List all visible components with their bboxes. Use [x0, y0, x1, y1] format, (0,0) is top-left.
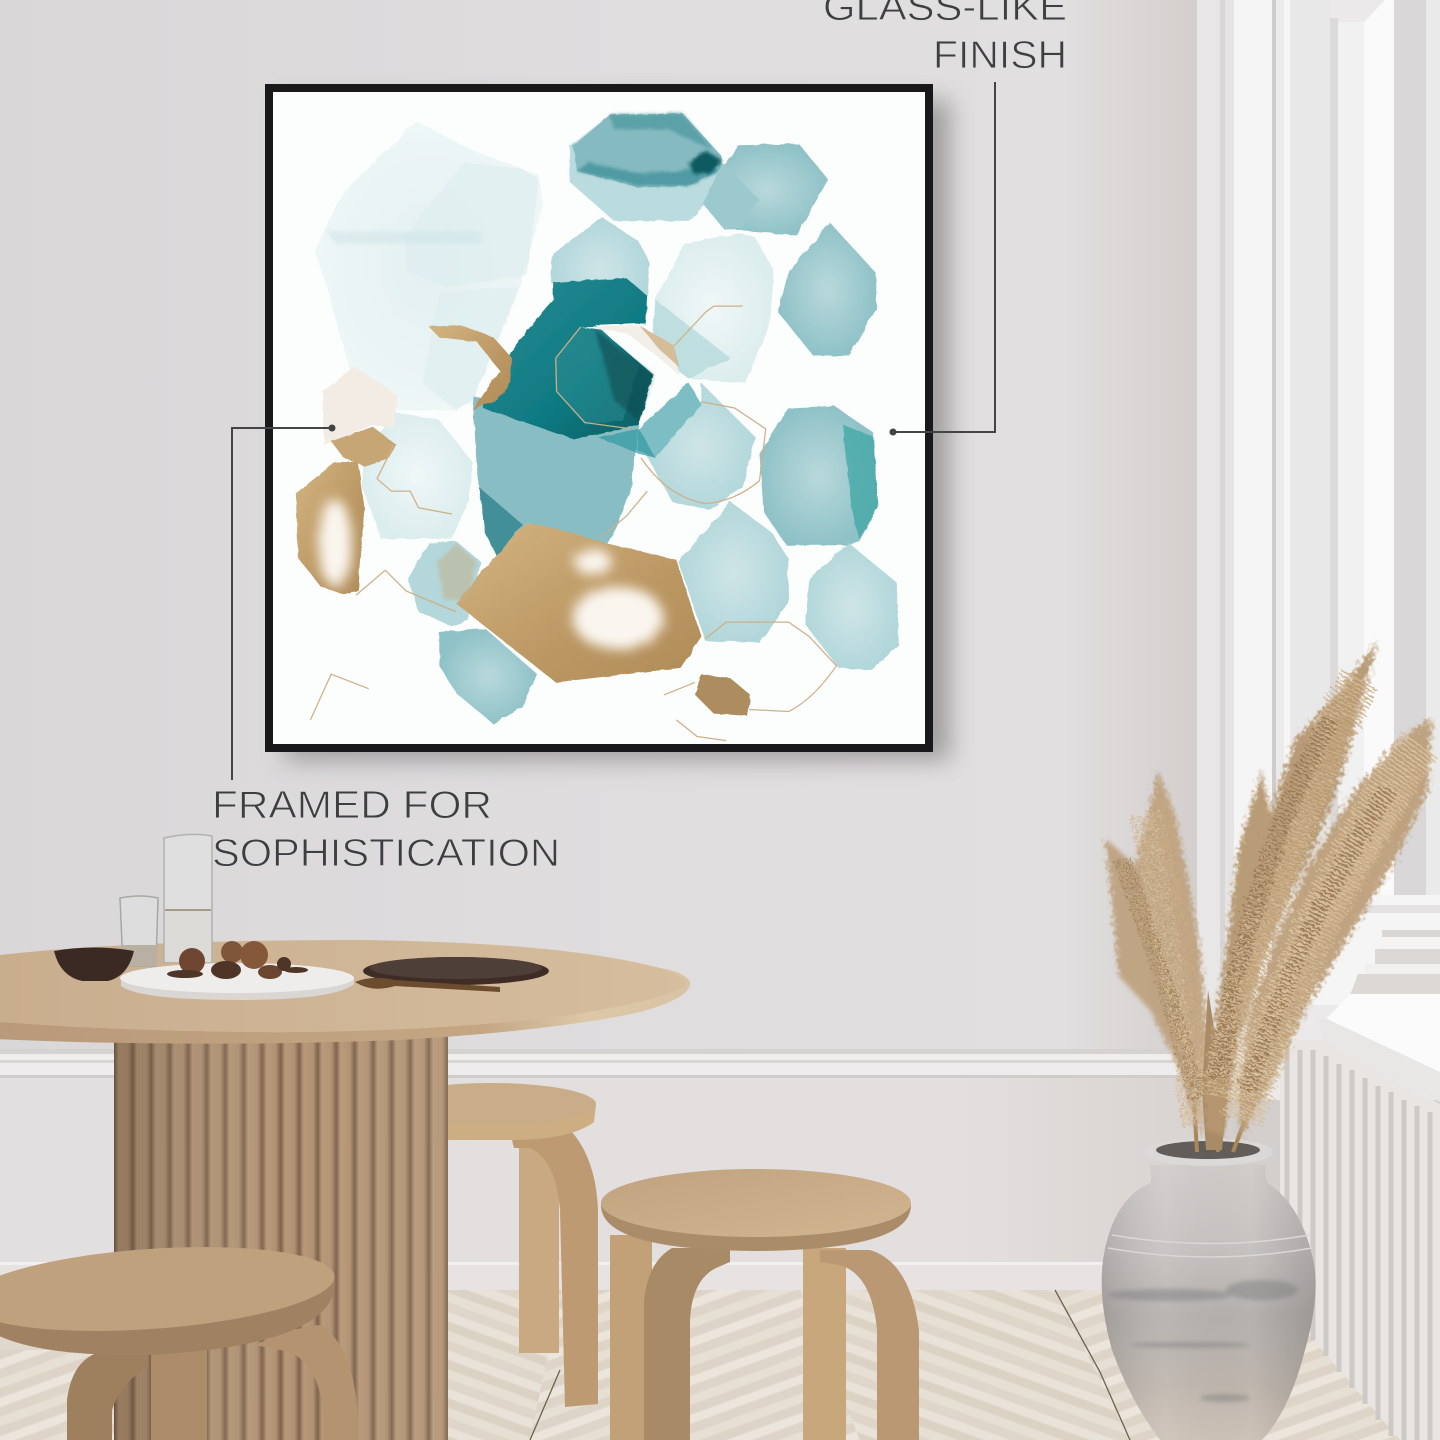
- callout: glass-like finish: FINISH: [933, 34, 1067, 77]
- callout: framed for sophistication: SOPHISTICATION: [212, 832, 560, 875]
- floor: [0, 1290, 1400, 1440]
- right plume: [1238, 718, 1432, 1140]
- dark bowl: [54, 948, 134, 981]
- nuts: [167, 941, 308, 979]
- dark plate: [363, 957, 549, 985]
- marble board: [120, 963, 354, 1000]
- radiator: [1280, 1040, 1440, 1440]
- glass bottle: [164, 834, 212, 962]
- left plume: [1105, 770, 1208, 1135]
- table edge: [0, 968, 690, 1044]
- window and trim: [1197, 0, 1440, 1100]
- callout: framed for sophistication: FRAMED FOR: [212, 784, 492, 827]
- vase: [1102, 1138, 1316, 1440]
- books on windowsill: [1350, 930, 1440, 995]
- windowsill: [1318, 994, 1440, 1102]
- pampas grass: [1105, 640, 1432, 1152]
- frame: [265, 84, 933, 752]
- watercolour shapes: [296, 114, 899, 741]
- framed artwork: [265, 84, 933, 752]
- callout: framed for sophistication: [212, 424, 560, 875]
- drinking glass: [120, 896, 158, 966]
- callout: glass-like finish: [823, 0, 1067, 436]
- round table: [0, 940, 690, 1440]
- gold leaf highlights: [319, 499, 664, 649]
- small centre plume: [1202, 990, 1228, 1150]
- back stool: [386, 1083, 598, 1407]
- spoon: [355, 978, 500, 992]
- table top: [0, 940, 686, 1032]
- middle plume: [1205, 640, 1378, 1135]
- canvas: [273, 92, 925, 744]
- tableware: [54, 834, 549, 1000]
- front right stool: [601, 1169, 919, 1440]
- front left stool: [0, 1236, 358, 1440]
- frame shadow: [285, 100, 950, 760]
- stems: [1194, 1100, 1245, 1152]
- gold line work: [310, 306, 836, 741]
- fluted pedestal: [114, 1030, 448, 1440]
